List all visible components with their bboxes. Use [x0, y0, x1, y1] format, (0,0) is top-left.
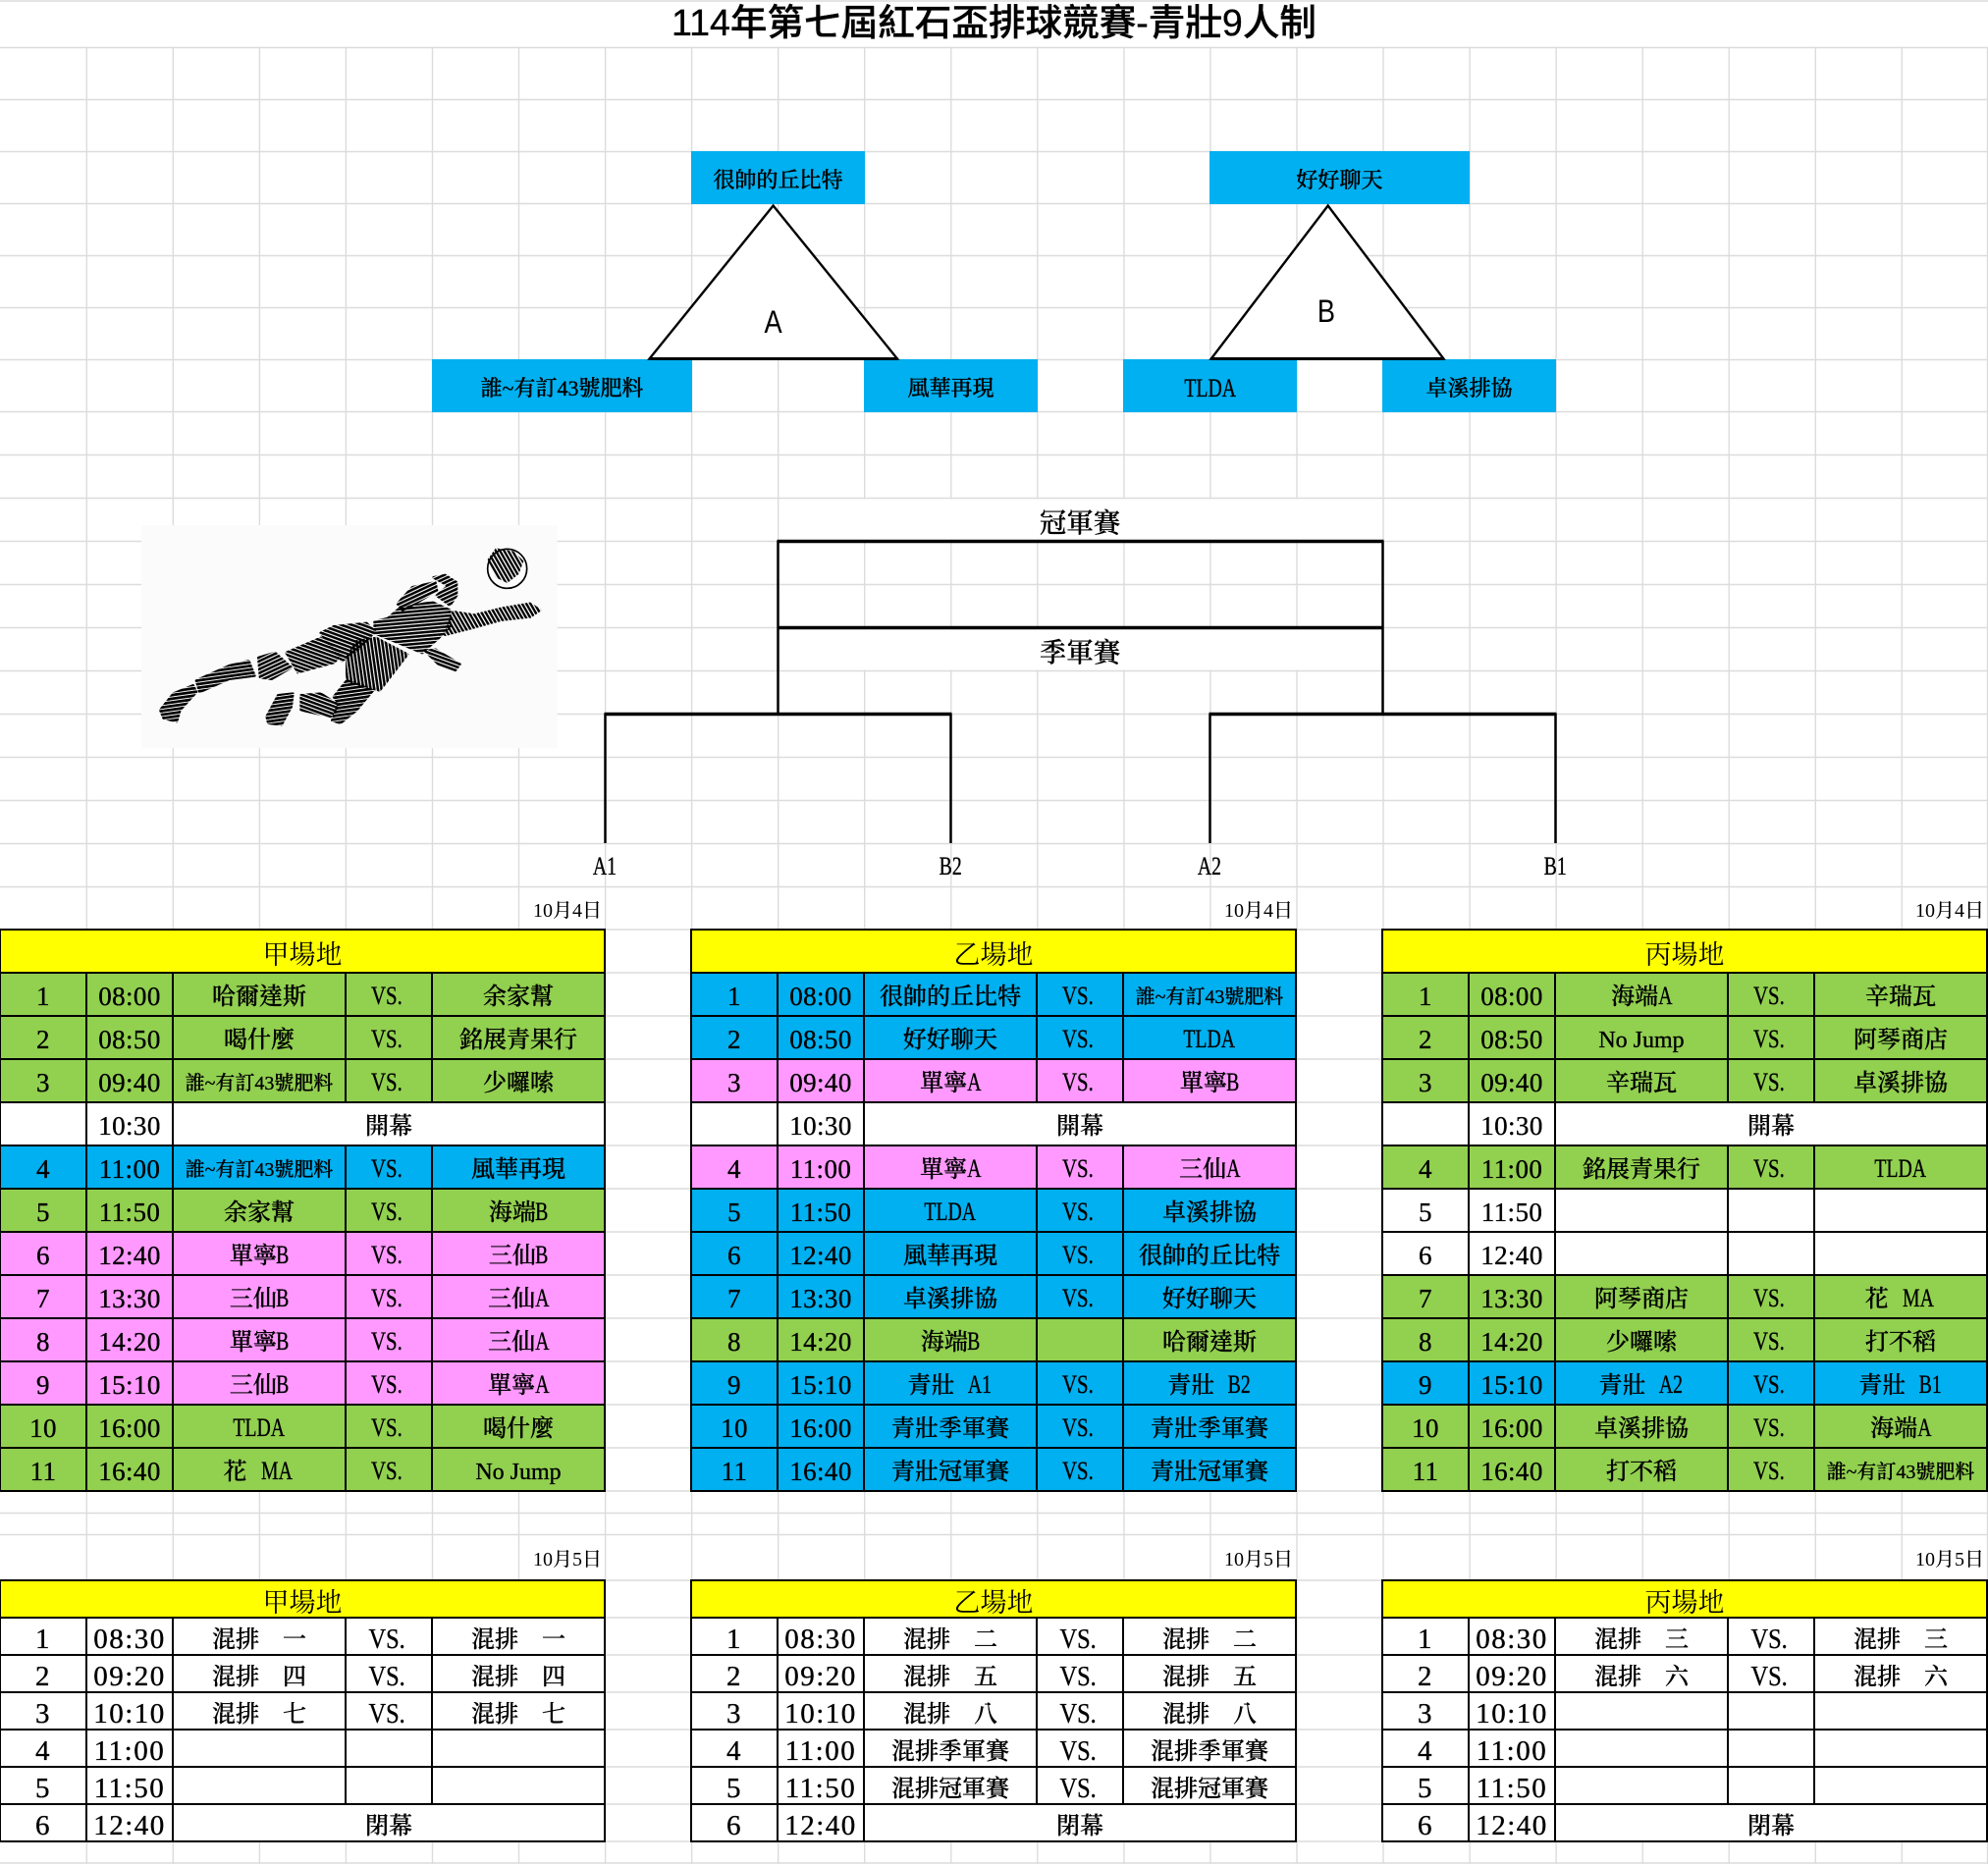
schedule table: 乙場地 10月4日: VS.	[1062, 1198, 1094, 1226]
schedule table: 乙場地 10月4日: 青壯	[908, 1373, 955, 1399]
group B team: 卓溪排協: 卓溪排協	[1425, 376, 1512, 400]
date: court 乙 day 1: 10月4日	[1224, 900, 1293, 922]
schedule table: 丙場地 10月5日: 4	[1418, 1735, 1433, 1767]
schedule table: 丙場地 10月4日: B1	[1918, 1370, 1942, 1399]
group A team: 誰~有訂43號肥料	[432, 359, 692, 412]
schedule table: 甲場地 10月5日: 11:00	[94, 1735, 165, 1767]
schedule table: 乙場地 10月4日: VS.	[1062, 1413, 1094, 1442]
group A team: 風華再現: 風華再現	[907, 376, 994, 400]
bracket seed: A2: A2	[1198, 852, 1221, 880]
schedule table: 甲場地 10月4日: 哈爾達斯	[212, 984, 306, 1009]
tournament bracket lines	[604, 540, 1557, 843]
schedule table: 甲場地 10月5日: 12:40	[93, 1810, 166, 1841]
schedule table: 甲場地 10月4日: 08:00	[98, 982, 161, 1011]
schedule table: 甲場地 10月4日: VS.	[371, 1241, 403, 1269]
schedule table: 甲場地 10月5日: 6	[35, 1810, 51, 1841]
schedule table: 丙場地 10月4日: VS.	[1753, 1068, 1785, 1096]
schedule table: 丙場地 10月5日	[1381, 1579, 1988, 1842]
schedule table: 甲場地 10月4日: 三仙	[488, 1287, 535, 1312]
bracket seed: B1: B1	[1543, 852, 1567, 880]
schedule table: 甲場地 10月4日: 10	[29, 1413, 57, 1443]
schedule table: 丙場地 10月4日: 3	[1419, 1068, 1432, 1097]
schedule table: 甲場地 10月4日: 喝什麼	[224, 1027, 295, 1052]
schedule table: 丙場地 10月4日: 銘展青果行	[1583, 1156, 1700, 1182]
schedule table: 乙場地 10月4日: B	[1226, 1068, 1240, 1096]
schedule table: 丙場地 10月4日: VS.	[1753, 1327, 1785, 1356]
schedule table: 甲場地 10月4日: 花	[224, 1460, 247, 1485]
schedule table: 甲場地 10月4日: No Jump	[475, 1459, 562, 1484]
schedule table: 甲場地 10月4日: B	[276, 1284, 290, 1312]
schedule table: 甲場地 10月4日: MA	[261, 1457, 293, 1485]
schedule table: 丙場地 10月4日: No Jump	[1598, 1027, 1685, 1052]
schedule table: 丙場地 10月5日: 12:40	[1476, 1810, 1548, 1841]
schedule table: 丙場地 10月4日: 丙場地	[1645, 940, 1725, 970]
schedule table: 丙場地 10月4日: 08:00	[1480, 982, 1543, 1011]
schedule table: 丙場地 10月4日: TLDA	[1875, 1154, 1926, 1183]
schedule table: 丙場地 10月4日: 15:10	[1480, 1370, 1543, 1400]
volleyball player illustration	[141, 525, 558, 748]
bracket seed: B2: B2	[939, 852, 962, 880]
schedule table: 丙場地 10月4日: 6	[1419, 1241, 1432, 1270]
schedule table: 丙場地 10月4日: VS.	[1753, 1154, 1785, 1183]
schedule table: 丙場地 10月4日: 08:50	[1480, 1025, 1543, 1054]
schedule table: 乙場地 10月5日: 2	[726, 1661, 742, 1692]
schedule table: 甲場地 10月4日: VS.	[371, 982, 403, 1010]
schedule table: 丙場地 10月4日: MA	[1903, 1284, 1934, 1312]
schedule table: 乙場地 10月4日: 青壯	[1167, 1373, 1214, 1399]
schedule table: 丙場地 10月5日: 6	[1418, 1810, 1433, 1841]
schedule table: 甲場地 10月4日: 余家幫	[483, 984, 554, 1009]
schedule table: 乙場地 10月5日: 08:30	[784, 1624, 857, 1655]
schedule table: 丙場地 10月5日: 閉幕	[1747, 1814, 1795, 1839]
schedule table: 甲場地 10月5日: VS.	[368, 1661, 405, 1692]
schedule table: 乙場地 10月4日: 2	[727, 1025, 741, 1054]
schedule table: 丙場地 10月5日: 3	[1418, 1698, 1433, 1730]
schedule table: 乙場地 10月5日: 5	[726, 1773, 742, 1804]
schedule table: 乙場地 10月4日: A	[1226, 1154, 1240, 1183]
schedule table: 丙場地 10月4日: 11	[1413, 1457, 1438, 1486]
schedule table: 甲場地 10月4日: 6	[36, 1241, 50, 1270]
schedule table: 乙場地 10月4日: VS.	[1062, 1154, 1094, 1183]
schedule table: 甲場地 10月5日: VS.	[368, 1698, 405, 1730]
schedule table: 乙場地 10月4日: 青壯季軍賽	[1151, 1415, 1268, 1441]
schedule table: 乙場地 10月4日: 哈爾達斯	[1162, 1329, 1257, 1355]
schedule table: 乙場地 10月4日: 好好聊天	[903, 1027, 997, 1052]
schedule table: 甲場地 10月4日: 單寧	[488, 1373, 535, 1399]
schedule table: 乙場地 10月4日: 08:00	[789, 982, 852, 1011]
schedule table: 乙場地 10月4日: 15:10	[789, 1370, 852, 1400]
schedule table: 甲場地 10月4日: 三仙	[489, 1244, 536, 1269]
schedule table: 甲場地 10月4日: B	[535, 1241, 549, 1269]
schedule table: 乙場地 10月4日: B	[967, 1327, 981, 1356]
schedule table: 甲場地 10月4日: 9	[36, 1370, 50, 1400]
schedule table: 乙場地 10月4日: 很帥的丘比特	[1139, 1243, 1280, 1268]
schedule table: 丙場地 10月4日: 4	[1419, 1154, 1432, 1184]
group A team: 風華再現	[864, 359, 1038, 412]
schedule table: 丙場地 10月4日: A	[1917, 1413, 1931, 1442]
group A team: 誰~有訂43號肥料: 誰~有訂43號肥料	[481, 376, 643, 400]
group B team: 卓溪排協	[1382, 359, 1556, 412]
schedule table: 甲場地 10月4日: 余家幫	[224, 1199, 295, 1225]
schedule table: 乙場地 10月5日: VS.	[1059, 1698, 1097, 1730]
schedule table: 丙場地 10月4日: 11:00	[1481, 1154, 1542, 1184]
schedule table: 丙場地 10月4日: VS.	[1753, 1413, 1785, 1442]
date: court 乙 day 2: 10月5日	[1224, 1549, 1293, 1571]
schedule table: 乙場地 10月5日: 11:50	[785, 1773, 856, 1804]
schedule table: 乙場地 10月4日: 08:50	[789, 1025, 852, 1054]
triangle group A	[647, 204, 899, 360]
schedule table: 丙場地 10月4日: 16:40	[1480, 1457, 1543, 1486]
schedule table: 甲場地 10月4日: 甲場地	[263, 940, 343, 970]
schedule table: 乙場地 10月5日: 混排 二	[903, 1627, 997, 1653]
schedule table: 丙場地 10月5日: 11:00	[1477, 1735, 1547, 1767]
schedule table: 甲場地 10月4日: VS.	[371, 1327, 403, 1356]
schedule table: 甲場地 10月4日: 10:30	[98, 1111, 161, 1141]
schedule table: 甲場地 10月4日: 14:20	[98, 1327, 161, 1357]
schedule table: 甲場地 10月4日: 15:10	[98, 1370, 161, 1400]
schedule table: 乙場地 10月4日: 9	[727, 1370, 741, 1400]
schedule table: 丙場地 10月5日: 5	[1418, 1773, 1433, 1804]
schedule table: 甲場地 10月5日: 混排 一	[212, 1627, 306, 1653]
schedule table: 甲場地 10月4日: 銘展青果行	[459, 1027, 577, 1052]
triangle group B: B	[1317, 294, 1335, 330]
schedule table: 乙場地 10月4日: TLDA	[1184, 1025, 1235, 1053]
schedule table: 乙場地 10月4日: 很帥的丘比特	[880, 984, 1021, 1009]
schedule table: 甲場地 10月4日: 三仙	[230, 1373, 277, 1399]
schedule table: 丙場地 10月4日: 9	[1419, 1370, 1432, 1400]
schedule table: 甲場地 10月4日: 16:00	[98, 1413, 161, 1443]
schedule table: 甲場地 10月4日: 11	[30, 1457, 56, 1486]
schedule table: 乙場地 10月4日: VS.	[1062, 1370, 1094, 1399]
schedule table: 乙場地 10月4日: 好好聊天	[1162, 1286, 1257, 1311]
schedule table: 丙場地 10月5日: 混排 六	[1854, 1665, 1948, 1690]
schedule table: 丙場地 10月4日: VS.	[1753, 1370, 1785, 1399]
schedule table: 甲場地 10月5日: VS.	[368, 1624, 405, 1655]
triangle group A: A	[765, 305, 782, 341]
schedule table: 乙場地 10月5日: VS.	[1059, 1735, 1097, 1767]
schedule table: 甲場地 10月4日: 誰~有訂43號肥料	[186, 1158, 333, 1180]
schedule table: 丙場地 10月4日: A2	[1659, 1370, 1683, 1399]
bracket label: 冠軍賽: 冠軍賽	[1040, 507, 1120, 538]
schedule table: 丙場地 10月5日: 丙場地	[1645, 1588, 1725, 1618]
schedule table: 甲場地 10月4日: VS.	[371, 1154, 403, 1183]
schedule table: 甲場地 10月4日: 5	[36, 1198, 50, 1227]
schedule table: 甲場地 10月4日: B	[535, 1198, 549, 1226]
schedule table: 丙場地 10月5日: 09:20	[1476, 1661, 1548, 1692]
schedule table: 丙場地 10月4日: A	[1658, 982, 1672, 1010]
schedule table: 乙場地 10月5日: 混排 八	[903, 1702, 997, 1728]
schedule table: 丙場地 10月4日: 辛瑞瓦	[1865, 984, 1936, 1009]
schedule table: 甲場地 10月4日: VS.	[371, 1198, 403, 1226]
schedule table: 乙場地 10月5日: 混排季軍賽	[1151, 1739, 1268, 1765]
schedule table: 甲場地 10月4日: 2	[36, 1025, 50, 1054]
schedule table: 乙場地 10月4日: 10	[721, 1413, 748, 1443]
schedule table: 甲場地 10月5日: 4	[35, 1735, 51, 1767]
schedule table: 乙場地 10月5日: 混排 五	[903, 1665, 997, 1690]
schedule table: 甲場地 10月4日: 1	[36, 982, 50, 1011]
schedule table: 乙場地 10月4日: 4	[727, 1154, 741, 1184]
schedule table: 甲場地 10月4日: 三仙	[488, 1330, 535, 1356]
schedule table: 乙場地 10月4日: 09:40	[789, 1068, 852, 1097]
schedule table: 丙場地 10月5日: 混排 三	[1854, 1627, 1948, 1653]
schedule table: 丙場地 10月4日: 12:40	[1480, 1241, 1543, 1270]
schedule table: 甲場地 10月4日: 風華再現	[471, 1156, 565, 1182]
schedule table: 丙場地 10月5日: 08:30	[1476, 1624, 1548, 1655]
schedule table: 丙場地 10月5日: VS.	[1750, 1624, 1788, 1655]
schedule table: 丙場地 10月4日: 阿琴商店	[1594, 1286, 1689, 1311]
schedule table: 丙場地 10月4日: 辛瑞瓦	[1606, 1070, 1677, 1095]
schedule table: 丙場地 10月4日: 青壯	[1599, 1373, 1646, 1399]
schedule table: 丙場地 10月4日: 海端	[1611, 985, 1658, 1010]
schedule table: 丙場地 10月4日: 11:50	[1481, 1198, 1542, 1227]
schedule table: 甲場地 10月4日: 少囉嗦	[483, 1070, 554, 1095]
schedule table: 乙場地 10月5日: 10:10	[784, 1698, 857, 1730]
schedule table: 乙場地 10月4日: A1	[968, 1370, 992, 1399]
schedule table: 丙場地 10月4日: 誰~有訂43號肥料	[1827, 1461, 1974, 1482]
triangle group B	[1209, 204, 1446, 360]
date: court 甲 day 2: 10月5日	[533, 1549, 602, 1571]
schedule table: 乙場地 10月4日: 乙場地	[954, 940, 1034, 970]
schedule table: 丙場地 10月4日: 14:20	[1480, 1327, 1543, 1357]
schedule table: 丙場地 10月4日: 阿琴商店	[1854, 1027, 1948, 1052]
schedule table: 甲場地 10月5日: 11:50	[94, 1773, 165, 1804]
schedule table: 甲場地 10月4日: 單寧	[230, 1244, 277, 1269]
schedule table: 乙場地 10月5日: VS.	[1059, 1624, 1097, 1655]
schedule table: 乙場地 10月4日: 青壯季軍賽	[891, 1415, 1009, 1441]
schedule table: 甲場地 10月4日: 海端	[489, 1200, 536, 1226]
schedule table: 甲場地 10月4日: B	[276, 1241, 290, 1269]
schedule table: 乙場地 10月4日: 卓溪排協	[1162, 1199, 1257, 1225]
schedule table: 丙場地 10月4日: 1	[1419, 982, 1432, 1011]
schedule table: 丙場地 10月5日: 11:50	[1477, 1773, 1547, 1804]
group B team: 好好聊天	[1209, 151, 1470, 204]
schedule table: 甲場地 10月4日: 11:50	[99, 1198, 160, 1227]
date: court 丙 day 1: 10月4日	[1915, 900, 1984, 922]
schedule table: 乙場地 10月4日: 7	[727, 1284, 741, 1313]
schedule table: 乙場地 10月4日: 6	[727, 1241, 741, 1270]
schedule table: 乙場地 10月4日: VS.	[1062, 982, 1094, 1010]
schedule table: 乙場地 10月4日: VS.	[1062, 1457, 1094, 1485]
schedule table: 甲場地 10月5日: 甲場地	[263, 1588, 343, 1618]
schedule table: 乙場地 10月4日: 3	[727, 1068, 741, 1097]
schedule table: 乙場地 10月5日: 6	[726, 1810, 742, 1841]
schedule table: 乙場地 10月5日: 混排季軍賽	[891, 1739, 1009, 1765]
schedule table: 丙場地 10月4日: 花	[1865, 1287, 1889, 1312]
schedule table: 乙場地 10月5日: VS.	[1059, 1773, 1097, 1804]
schedule table: 乙場地 10月4日: 5	[727, 1198, 741, 1227]
schedule table: 甲場地 10月4日: TLDA	[234, 1413, 285, 1442]
schedule table: 乙場地 10月5日: 乙場地	[954, 1588, 1034, 1618]
schedule table: 乙場地 10月4日: B2	[1227, 1370, 1251, 1399]
schedule table: 甲場地 10月4日: 三仙	[230, 1287, 277, 1312]
schedule table: 丙場地 10月4日: 打不稻	[1606, 1459, 1677, 1484]
schedule table: 甲場地 10月4日: 3	[36, 1068, 50, 1097]
schedule table: 丙場地 10月5日: 1	[1418, 1624, 1433, 1655]
schedule table: 甲場地 10月4日: B	[276, 1370, 290, 1399]
schedule table: 甲場地 10月4日	[0, 929, 606, 1492]
schedule table: 乙場地 10月4日: 11:50	[790, 1198, 851, 1227]
schedule table: 丙場地 10月5日: 10:10	[1476, 1698, 1548, 1730]
schedule table: 丙場地 10月4日: 16:00	[1480, 1413, 1543, 1443]
schedule table: 乙場地 10月4日: 8	[727, 1327, 741, 1357]
schedule table: 乙場地 10月4日: VS.	[1062, 1068, 1094, 1096]
schedule table: 乙場地 10月5日: 閉幕	[1056, 1814, 1103, 1839]
schedule table: 丙場地 10月4日: 10:30	[1480, 1111, 1543, 1141]
schedule table: 丙場地 10月4日: 10	[1412, 1413, 1439, 1443]
schedule table: 乙場地 10月4日: A	[967, 1068, 981, 1096]
schedule table: 甲場地 10月4日: A	[535, 1327, 549, 1356]
schedule table: 丙場地 10月4日: 海端	[1870, 1416, 1917, 1442]
schedule table: 丙場地 10月4日: 09:40	[1480, 1068, 1543, 1097]
schedule table: 乙場地 10月5日: 3	[726, 1698, 742, 1730]
schedule table: 丙場地 10月4日: 打不稻	[1865, 1329, 1936, 1355]
schedule table: 甲場地 10月5日: 混排 四	[471, 1665, 565, 1690]
schedule table: 丙場地 10月4日: VS.	[1753, 982, 1785, 1010]
schedule table: 丙場地 10月4日: 8	[1419, 1327, 1432, 1357]
schedule table: 丙場地 10月4日: 開幕	[1747, 1113, 1795, 1139]
schedule table: 乙場地 10月5日: 混排 二	[1162, 1627, 1257, 1653]
schedule table: 甲場地 10月5日: 09:20	[93, 1661, 166, 1692]
schedule table: 丙場地 10月4日: VS.	[1753, 1284, 1785, 1312]
schedule table: 甲場地 10月4日: VS.	[371, 1370, 403, 1399]
schedule table: 甲場地 10月5日: 混排 一	[471, 1627, 565, 1653]
bracket label: 季軍賽: 季軍賽	[1040, 637, 1120, 667]
schedule table: 乙場地 10月4日: 11:00	[790, 1154, 851, 1184]
schedule table: 乙場地 10月4日: A	[967, 1154, 981, 1183]
schedule table: 丙場地 10月4日: 青壯	[1858, 1373, 1906, 1399]
schedule table: 乙場地 10月5日: 09:20	[784, 1661, 857, 1692]
schedule table: 乙場地 10月4日: 14:20	[789, 1327, 852, 1357]
schedule table: 丙場地 10月4日: 卓溪排協	[1594, 1415, 1689, 1441]
group B team: TLDA: TLDA	[1184, 374, 1236, 402]
schedule table: 甲場地 10月4日: A	[535, 1370, 549, 1399]
schedule table: 丙場地 10月5日: 2	[1418, 1661, 1433, 1692]
schedule table: 甲場地 10月4日: 7	[36, 1284, 50, 1313]
schedule table: 乙場地 10月5日: 混排 五	[1162, 1665, 1257, 1690]
schedule table: 甲場地 10月5日: 5	[35, 1773, 51, 1804]
schedule table: 丙場地 10月5日: 混排 三	[1594, 1627, 1689, 1653]
schedule table: 甲場地 10月4日: 開幕	[365, 1113, 412, 1139]
schedule table: 丙場地 10月5日: 混排 六	[1594, 1665, 1689, 1690]
group A team: 很帥的丘比特: 很帥的丘比特	[713, 168, 842, 192]
schedule table: 丙場地 10月4日: 少囉嗦	[1606, 1329, 1677, 1355]
schedule table: 丙場地 10月4日: VS.	[1753, 1025, 1785, 1053]
schedule table: 甲場地 10月4日: 12:40	[98, 1241, 161, 1270]
schedule table: 乙場地 10月4日: 三仙	[1179, 1157, 1226, 1183]
schedule table: 丙場地 10月4日: 2	[1419, 1025, 1432, 1054]
schedule table: 甲場地 10月5日: 3	[35, 1698, 51, 1730]
schedule table: 乙場地 10月5日: 混排 八	[1162, 1702, 1257, 1728]
schedule table: 甲場地 10月4日: VS.	[371, 1068, 403, 1096]
schedule table: 乙場地 10月4日: VS.	[1062, 1025, 1094, 1053]
schedule table: 甲場地 10月4日: 16:40	[98, 1457, 161, 1486]
schedule table: 甲場地 10月4日: A	[535, 1284, 549, 1312]
schedule table: 甲場地 10月4日: 8	[36, 1327, 50, 1357]
schedule table: 甲場地 10月5日	[0, 1579, 606, 1842]
group B team: TLDA	[1123, 359, 1297, 412]
schedule table: 甲場地 10月4日: 誰~有訂43號肥料	[186, 1072, 333, 1093]
schedule table: 甲場地 10月5日: 10:10	[93, 1698, 166, 1730]
title: 114年第七屆紅石盃排球競賽-青壯9人制	[672, 2, 1316, 43]
schedule table: 乙場地 10月5日: 4	[726, 1735, 742, 1767]
schedule table: 甲場地 10月4日: 09:40	[98, 1068, 161, 1097]
schedule table: 丙場地 10月4日: 5	[1419, 1198, 1432, 1227]
schedule table: 甲場地 10月4日: VS.	[371, 1025, 403, 1053]
schedule table: 甲場地 10月4日: VS.	[371, 1457, 403, 1485]
schedule table: 乙場地 10月5日: 12:40	[784, 1810, 857, 1841]
schedule table: 乙場地 10月4日: 單寧	[920, 1071, 967, 1096]
schedule table: 乙場地 10月4日: 1	[727, 982, 741, 1011]
schedule table: 乙場地 10月4日: TLDA	[925, 1198, 976, 1226]
schedule table: 甲場地 10月5日: 2	[35, 1661, 51, 1692]
schedule table: 乙場地 10月4日	[690, 929, 1297, 1492]
schedule table: 甲場地 10月4日: 08:50	[98, 1025, 161, 1054]
schedule table: 乙場地 10月4日: 12:40	[789, 1241, 852, 1270]
schedule table: 乙場地 10月4日: 11	[722, 1457, 747, 1486]
schedule table: 乙場地 10月4日: 海端	[921, 1330, 968, 1356]
schedule table: 乙場地 10月5日: 混排冠軍賽	[1151, 1777, 1268, 1802]
schedule table: 甲場地 10月4日: 喝什麼	[483, 1415, 554, 1441]
group A team: 很帥的丘比特	[691, 151, 865, 204]
schedule table: 甲場地 10月5日: 混排 七	[471, 1702, 565, 1728]
schedule table: 甲場地 10月4日: 11:00	[99, 1154, 160, 1184]
bracket seed: A1: A1	[593, 852, 617, 880]
schedule table: 乙場地 10月4日: VS.	[1062, 1284, 1094, 1312]
schedule table: 甲場地 10月5日: 1	[35, 1624, 51, 1655]
schedule table: 甲場地 10月4日: VS.	[371, 1413, 403, 1442]
schedule table: 乙場地 10月5日: 1	[726, 1624, 742, 1655]
schedule table: 乙場地 10月4日: 風華再現	[903, 1243, 997, 1268]
group B team: 好好聊天: 好好聊天	[1296, 168, 1382, 192]
schedule table: 乙場地 10月4日: 卓溪排協	[903, 1286, 997, 1311]
schedule table: 甲場地 10月5日: 混排 七	[212, 1702, 306, 1728]
schedule table: 乙場地 10月5日: 混排冠軍賽	[891, 1777, 1009, 1802]
schedule table: 甲場地 10月4日: 13:30	[98, 1284, 161, 1313]
schedule table: 甲場地 10月4日: VS.	[371, 1284, 403, 1312]
schedule table: 丙場地 10月4日: 卓溪排協	[1854, 1070, 1948, 1095]
schedule table: 乙場地 10月4日: 16:40	[789, 1457, 852, 1486]
schedule table: 乙場地 10月4日: 青壯冠軍賽	[891, 1459, 1009, 1484]
schedule table: 乙場地 10月4日: 16:00	[789, 1413, 852, 1443]
schedule table: 甲場地 10月4日: 4	[36, 1154, 50, 1184]
schedule table: 丙場地 10月5日: VS.	[1750, 1661, 1788, 1692]
schedule table: 乙場地 10月5日	[690, 1579, 1297, 1842]
schedule table: 甲場地 10月5日: 08:30	[93, 1624, 166, 1655]
schedule table: 乙場地 10月4日: 誰~有訂43號肥料	[1136, 985, 1283, 1007]
schedule table: 乙場地 10月4日: VS.	[1062, 1241, 1094, 1269]
date: court 丙 day 2: 10月5日	[1915, 1549, 1984, 1571]
schedule table: 丙場地 10月4日: 7	[1419, 1284, 1432, 1313]
schedule table: 丙場地 10月4日: VS.	[1753, 1457, 1785, 1485]
schedule table: 甲場地 10月4日: B	[276, 1327, 290, 1356]
schedule table: 乙場地 10月5日: VS.	[1059, 1661, 1097, 1692]
schedule table: 乙場地 10月4日: 開幕	[1056, 1113, 1103, 1139]
schedule table: 乙場地 10月4日: 13:30	[789, 1284, 852, 1313]
schedule table: 甲場地 10月5日: 閉幕	[365, 1814, 412, 1839]
schedule table: 乙場地 10月5日: 11:00	[785, 1735, 856, 1767]
schedule table: 丙場地 10月4日: 13:30	[1480, 1284, 1543, 1313]
schedule table: 甲場地 10月4日: 單寧	[230, 1330, 277, 1356]
schedule table: 丙場地 10月4日	[1381, 929, 1988, 1492]
schedule table: 乙場地 10月4日: 青壯冠軍賽	[1151, 1459, 1268, 1484]
schedule table: 甲場地 10月5日: 混排 四	[212, 1665, 306, 1690]
schedule table: 乙場地 10月4日: 單寧	[920, 1157, 967, 1183]
date: court 甲 day 1: 10月4日	[533, 900, 602, 922]
schedule table: 乙場地 10月4日: 10:30	[789, 1111, 852, 1141]
schedule table: 乙場地 10月4日: 單寧	[1180, 1071, 1227, 1096]
